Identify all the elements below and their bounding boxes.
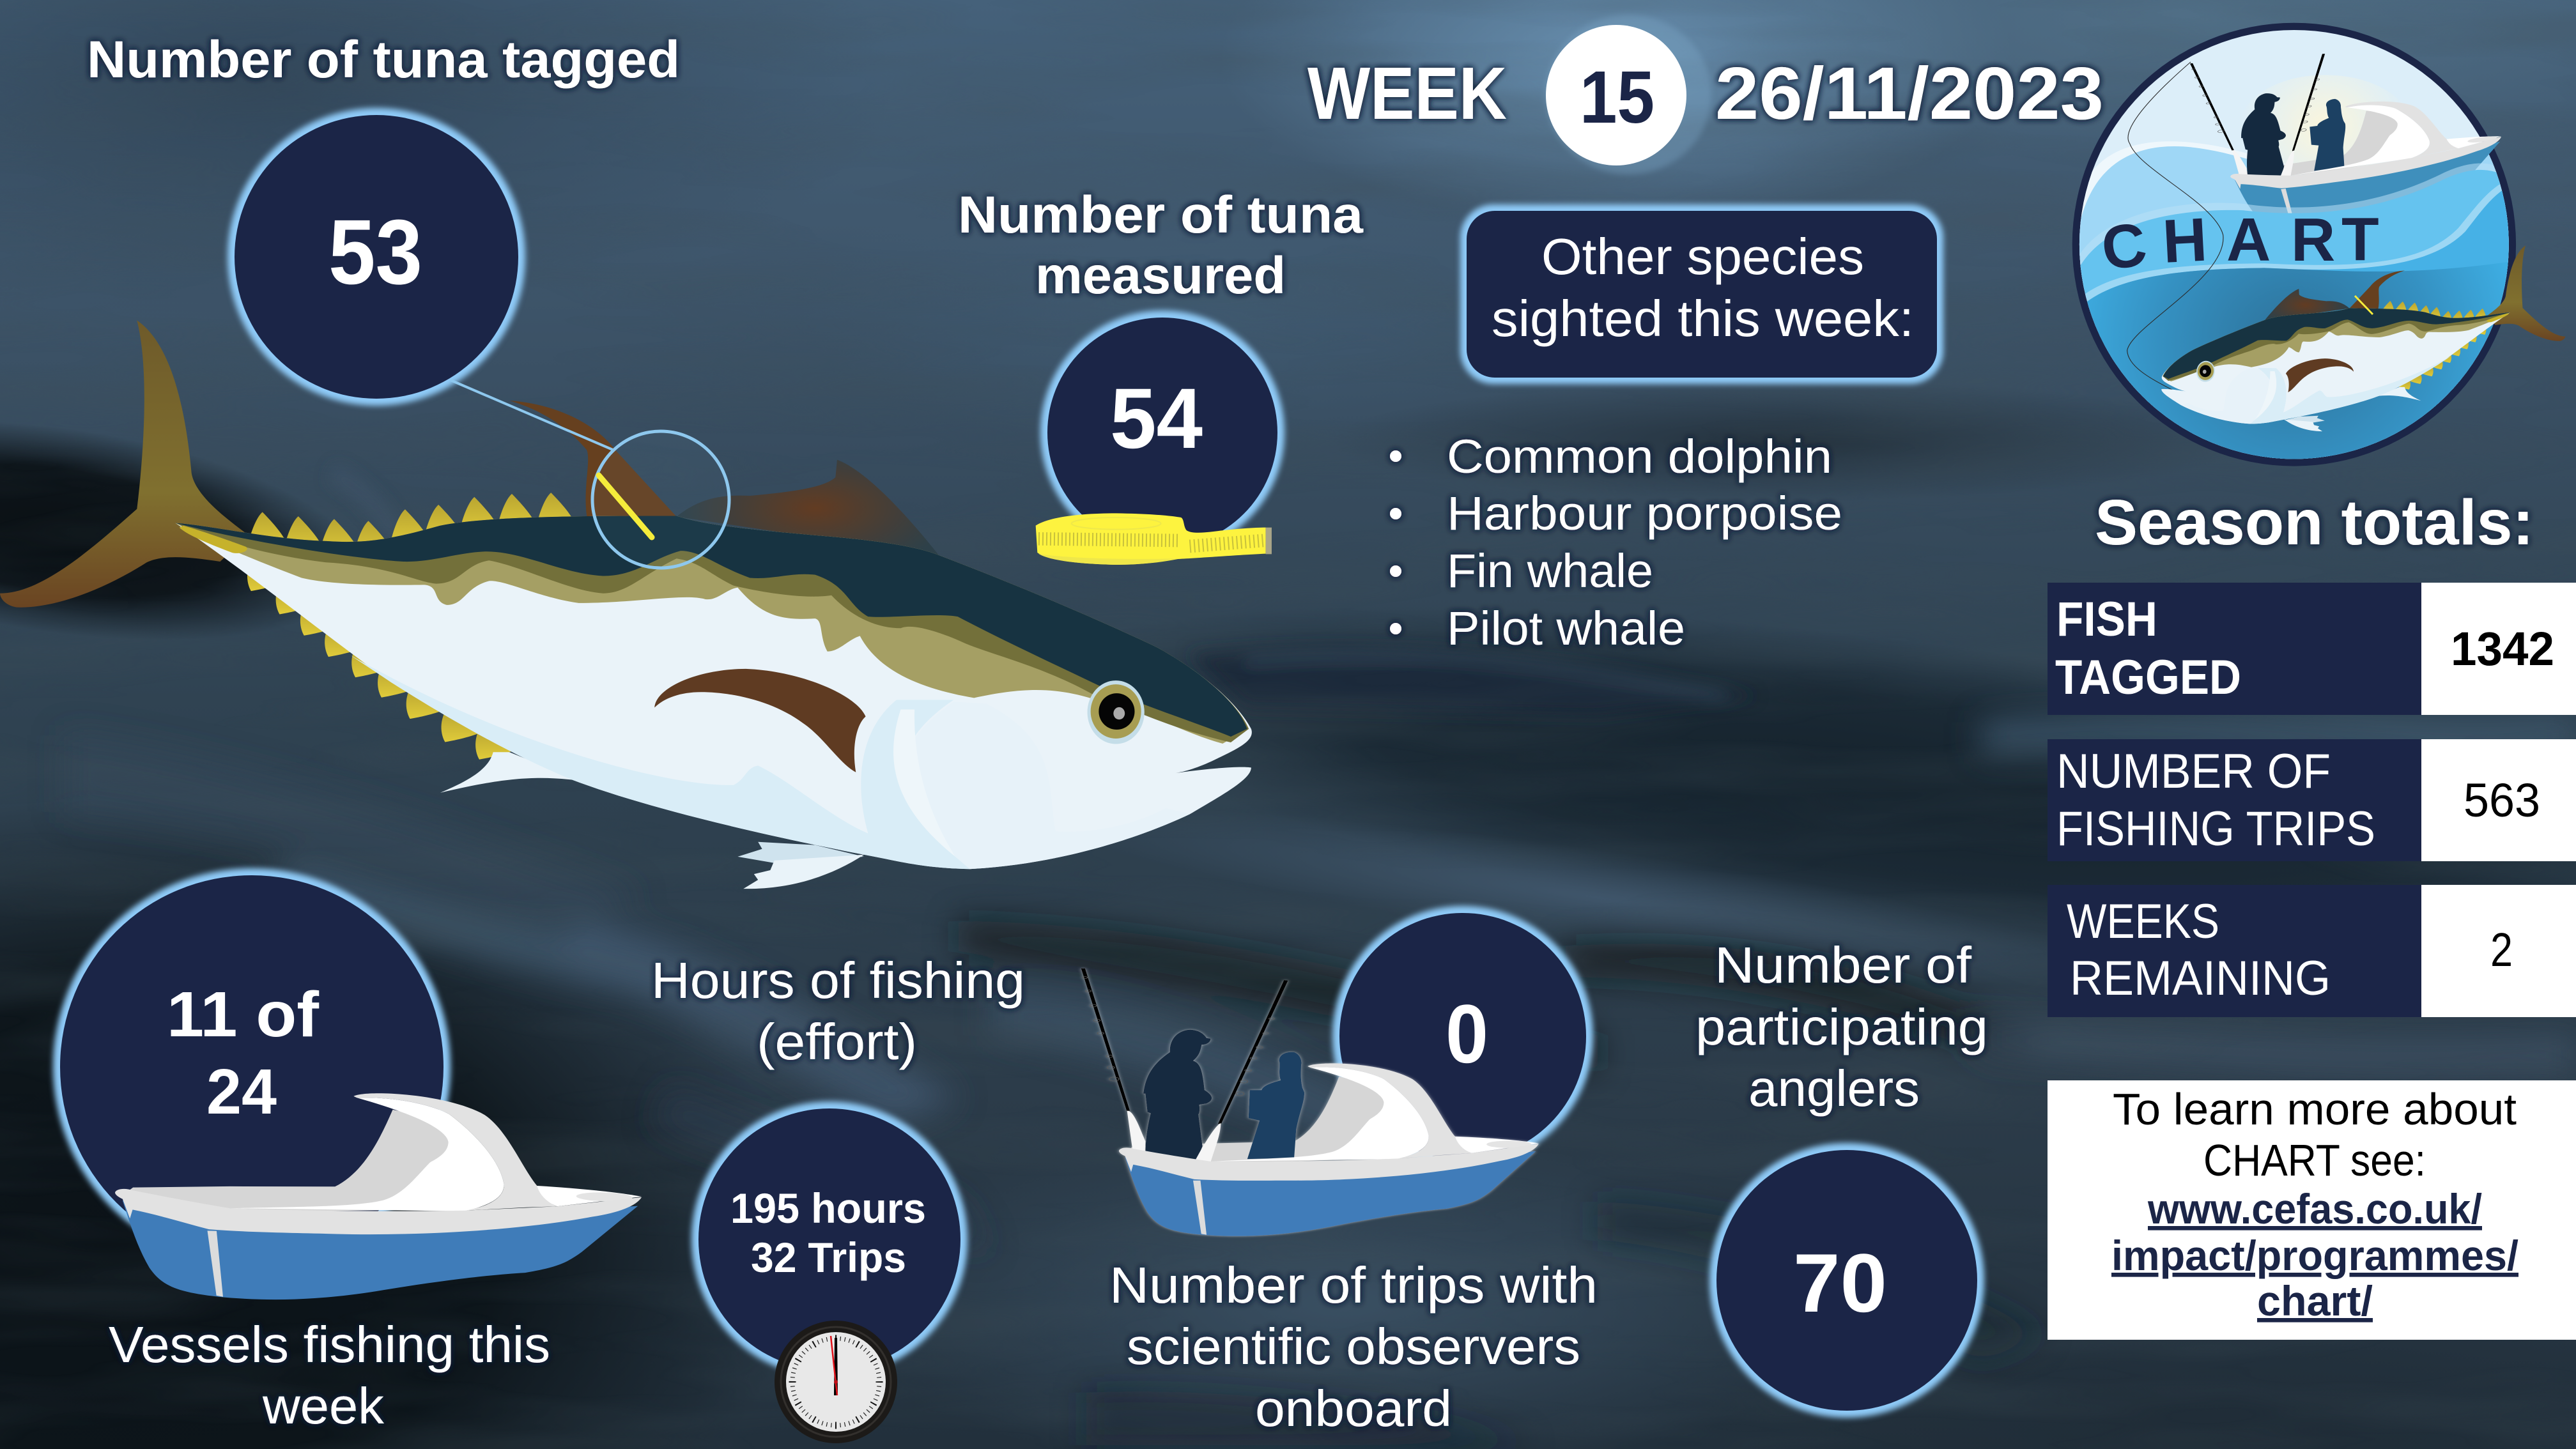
icon: tape measure <box>1036 513 1272 565</box>
label: trips with scientific observers: Number of trips with <box>1109 1257 1598 1314</box>
heading: week number and date: 15 <box>1580 56 1654 139</box>
heading: number of tuna measured: Number of tuna <box>958 186 1364 244</box>
heading: number of tuna measured <box>958 186 1364 305</box>
label: participating anglers: Number of <box>1715 937 1972 993</box>
table row: weeks remaining: WEEKS <box>2067 894 2219 949</box>
panel: learn more link: To learn more about <box>2113 1084 2517 1134</box>
list: other species sighted <box>1390 430 1842 655</box>
icon: clock <box>775 1321 897 1443</box>
panel: other species heading: Other species <box>1541 228 1864 285</box>
stat circle: anglers 70 <box>1709 1143 1984 1418</box>
table row: weeks remaining: REMAINING <box>2070 951 2331 1006</box>
stat circle: tuna measured 54: 54 <box>1110 371 1203 466</box>
panel: learn more link: impact/programmes/ <box>2111 1232 2518 1279</box>
table row: fishing trips: FISHING TRIPS <box>2056 802 2375 856</box>
label: vessels fishing this week: Vessels fishing this <box>109 1316 550 1373</box>
icon: boat with anglers <box>1081 969 1539 1236</box>
table row: weeks remaining: 2 <box>2490 923 2513 976</box>
stat circle: tuna measured 54 <box>1040 310 1284 555</box>
label: trips with scientific observers <box>1109 1257 1598 1437</box>
label: hours of fishing <box>651 952 1025 1070</box>
list: other species sighted: Fin whale <box>1447 544 1653 597</box>
panel: learn more link: chart/ <box>2257 1277 2373 1324</box>
label: trips with scientific observers: scientific observers <box>1127 1318 1580 1375</box>
list: other species sighted: Common dolphin <box>1447 430 1832 483</box>
stat circle: vessels 11 of 24: 24 <box>206 1056 277 1128</box>
stat circle: trips with observers 0: 0 <box>1446 987 1488 1080</box>
table row: fish tagged: 1342 <box>2451 622 2554 675</box>
table row: fishing trips: 563 <box>2464 774 2540 827</box>
heading: week number and date: WEEK <box>1307 52 1507 135</box>
panel: other species heading <box>1460 204 1943 384</box>
label: hours of fishing: Hours of fishing <box>651 952 1025 1009</box>
label: participating anglers <box>1695 937 1988 1117</box>
heading: number of tuna measured: measured <box>1035 247 1286 305</box>
heading: season totals: Season totals: <box>2095 487 2534 558</box>
stat circle: tuna tagged 53 <box>228 108 525 406</box>
table row: weeks remaining <box>2048 885 2576 1017</box>
stat circle: 195 hours 32 trips <box>691 1101 968 1377</box>
table row: fish tagged <box>2048 583 2576 715</box>
heading: week number and date: 26/11/2023 <box>1715 52 2104 135</box>
label: trips with scientific observers: onboard <box>1255 1380 1452 1437</box>
table row: fishing trips <box>2048 739 2576 861</box>
panel: learn more link: CHART see: <box>2203 1135 2426 1185</box>
heading: number of tuna tagged: Number of tuna tagged <box>87 31 680 89</box>
label: participating anglers: participating <box>1695 999 1988 1055</box>
table row: fish tagged: FISH <box>2056 592 2157 647</box>
panel: other species heading: sighted this week: <box>1492 290 1914 347</box>
label: vessels fishing this week <box>109 1316 550 1434</box>
stat circle: anglers 70: 70 <box>1793 1236 1887 1330</box>
stat circle: tuna tagged 53: 53 <box>328 201 422 303</box>
tag callout: leader line and ring <box>451 380 729 568</box>
stat circle: trips with observers 0 <box>1332 906 1593 1167</box>
label: vessels fishing this week: week <box>262 1377 385 1434</box>
label: hours of fishing: (effort) <box>757 1013 917 1070</box>
icon: boat <box>113 1087 644 1309</box>
table row: fishing trips: NUMBER OF <box>2056 744 2331 799</box>
list: other species sighted: Harbour porpoise <box>1447 487 1842 540</box>
panel: learn more link: www.cefas.co.uk/ <box>2147 1185 2482 1232</box>
logo: CHART roundel <box>2067 20 2570 476</box>
stat circle: vessels 11 of 24: 11 of <box>167 979 320 1050</box>
panel: learn more link <box>2048 1080 2576 1340</box>
logo: CHART roundel: CHART <box>2097 205 2379 284</box>
stat circle: vessels 11 of 24 <box>53 868 451 1266</box>
table row: fish tagged: TAGGED <box>2055 650 2241 705</box>
tuna illustration <box>0 321 1252 889</box>
label: participating anglers: anglers <box>1748 1060 1920 1117</box>
stat circle: 195 hours 32 trips: 32 Trips <box>751 1234 906 1281</box>
list: other species sighted: Pilot whale <box>1447 602 1685 655</box>
heading: week number and date <box>1307 15 2104 174</box>
stat circle: 195 hours 32 trips: 195 hours <box>730 1184 926 1232</box>
